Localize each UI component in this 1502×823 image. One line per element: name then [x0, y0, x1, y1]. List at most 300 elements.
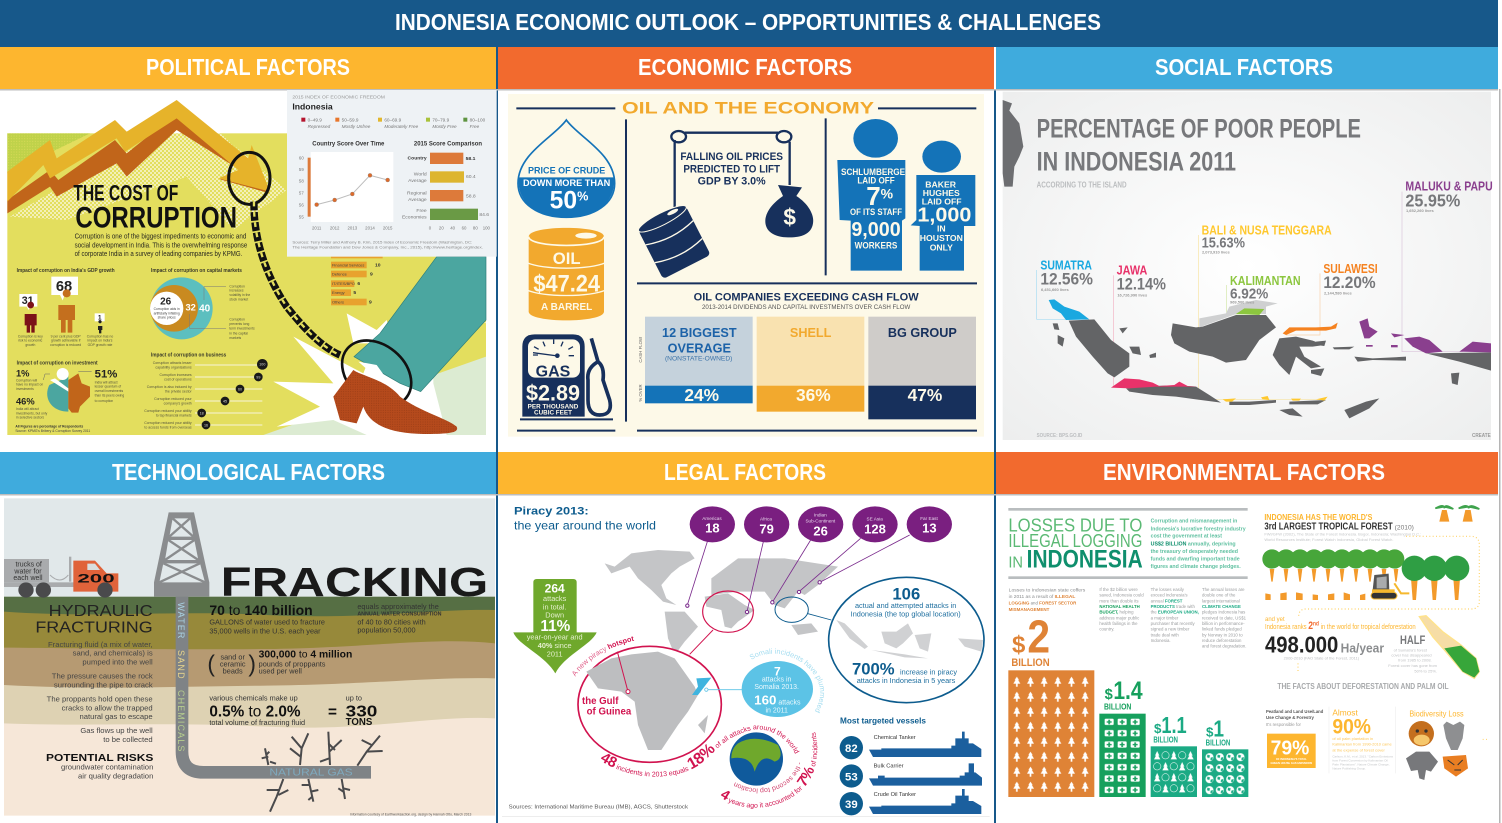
- losses heading: IN: [1008, 555, 1023, 572]
- proppants stat: pounds of proppants: [259, 659, 326, 668]
- money bag: $: [783, 204, 796, 230]
- heading: technological factors: [0, 452, 496, 494]
- money background: [263, 357, 486, 435]
- bar comparison chart: 60: [462, 226, 467, 231]
- spiral statistic text: - the second top location: [734, 762, 800, 794]
- business impact sliders: Corruption increases: [160, 373, 192, 377]
- source: SOURCE: BPS.GO.ID: [1037, 433, 1082, 439]
- falling oil prices text: PREDICTED TO LIFT: [683, 163, 780, 175]
- capital markets donut: 32: [185, 303, 196, 313]
- forest heading: [1264, 512, 1414, 533]
- forest source: World Resources Institute; Forest Watch Indonesia, Global Forest Watch.: [1264, 537, 1394, 542]
- most targeted vessels: Crude Oil Tanker: [874, 792, 916, 798]
- investment piggy: have no impact on: [16, 383, 43, 387]
- investment piggy: Source: KPMG's Bribery & Corruption Survey 2011: [15, 429, 90, 433]
- truck: trucks of: [15, 562, 42, 569]
- intro text: [75, 234, 247, 258]
- business impact sliders: company's growth: [164, 402, 192, 406]
- bar comparison chart: 0: [429, 226, 432, 231]
- column text: climate pledges: largest international: [1202, 598, 1240, 603]
- falling arrow: [7, 100, 270, 213]
- 90 percent block: [1332, 708, 1393, 771]
- column text: climate pledges: [1202, 587, 1247, 649]
- GDP impact block: 1: [98, 315, 102, 322]
- bar comparison chart: 80: [473, 226, 478, 231]
- biodiversity loss: [1406, 708, 1468, 780]
- business impact sliders: to access funds from overseas: [144, 426, 192, 430]
- proppants stat: ceramic: [220, 659, 246, 668]
- most targeted vessels: 39: [845, 799, 858, 811]
- losses heading: ILLEGAL LOGGING: [1008, 530, 1142, 551]
- column: 12 biggest: OVERAGE: [668, 341, 731, 355]
- 79 percent block: OF INDONESIA'S TOTAL: [1276, 757, 1307, 761]
- title bar: INDONESIA ECONOMIC OUTLOOK – OPPORTUNITIES & CHALLENGES: [395, 9, 1101, 35]
- jawa: 12.14%: [1117, 275, 1166, 294]
- baker hughes figure: LAID OFF: [922, 196, 962, 206]
- water comparison: population 50,000: [357, 626, 416, 635]
- cash flow heading: OIL COMPANIES EXCEEDING CASH FLOW: [694, 292, 919, 304]
- legend: 60–69.9: [384, 117, 402, 122]
- down arrow: 264 attacks: [513, 579, 597, 673]
- deforestation rank: Indonesia ranks 2: [1265, 620, 1317, 632]
- indonesia callout: 700%: [852, 659, 895, 678]
- business impact sliders: 16: [204, 423, 208, 427]
- sector bars: 9: [369, 299, 372, 305]
- chemicals stat: total volume of fracturing fluid: [209, 718, 305, 727]
- column text: climate pledges: received to date, US$1: [1202, 615, 1247, 620]
- investment piggy: 1%: [16, 369, 30, 379]
- heading: political factors: [0, 47, 496, 89]
- capital markets donut: Corruption: [229, 317, 245, 321]
- process text: sand, and chemicals) is: [73, 649, 153, 658]
- column: 12 biggest: 24%: [684, 385, 719, 405]
- derrick: [154, 512, 209, 597]
- sulawesi: 2,144,580 lives: [1324, 290, 1352, 295]
- half text: of Sumatra's forest: [1394, 647, 1428, 652]
- heading: environmental factors: ENVIRONMENTAL FACTORS: [1103, 459, 1385, 485]
- water stat: 70 to 140 billion: [209, 602, 313, 618]
- indonesia callout: attacks in Indonesia in 5 years: [857, 676, 956, 685]
- kalimantan: [1230, 273, 1301, 305]
- schlumberger figure: 9,000: [851, 218, 901, 241]
- oil barrel: A BARREL: [541, 302, 592, 313]
- line chart: 57: [299, 191, 304, 196]
- forest heading: 3rd LARGEST TROPICAL FOREST: [1264, 522, 1393, 533]
- pipe labels: CHEMICALS: [176, 690, 186, 751]
- sumatra: [1040, 257, 1093, 292]
- axis labels: CASH FLOW: [638, 336, 643, 363]
- line chart: 2012: [330, 226, 340, 231]
- process text: Fracturing fluid (a mix of water,: [48, 640, 153, 649]
- region bubbles: 128: [864, 521, 886, 536]
- column text: climate pledges: linked funds pledged: [1202, 627, 1242, 632]
- process text: Gas flows up the well: [80, 726, 153, 735]
- sources: The Heritage Foundation and Dow Jones & Company, Inc., 2015), http://www.heritage.org/index.: [292, 245, 483, 250]
- investment piggy: overall investments: [95, 389, 123, 393]
- forest source: FWI/GFW (2002), The State of the Forest Indonesia. Bogor, Indonesia; Washington D.C.:: [1264, 532, 1421, 537]
- legend: Mostly Free: [432, 124, 457, 129]
- water comparison: of 40 to 80 cities with: [357, 617, 426, 626]
- column text: state coffers: [1009, 588, 1086, 613]
- intro paragraph: funds and dwarfing important trade: [1151, 556, 1240, 562]
- jawa: JAWA: [1117, 263, 1148, 278]
- cash flow subheading: 2013-2014 DIVIDENDS AND CAPITAL INVESTMENTS OVER CASH FLOW: [702, 304, 910, 311]
- axis labels: [638, 336, 643, 402]
- down arrow: 264 attacks: Down: [545, 610, 564, 619]
- title: IN INDONESIA 2011: [1037, 147, 1236, 177]
- panel: environmental - deforestation: [1008, 506, 1488, 797]
- oil drop: PRICE OF CRUDE: [528, 166, 605, 176]
- GDP impact block: Corruption is key: [18, 334, 43, 338]
- heading: economic factors: ECONOMIC FACTORS: [638, 54, 852, 80]
- world map: [605, 550, 838, 655]
- line chart: 2013: [348, 226, 358, 231]
- investment piggy: India will attract: [16, 407, 39, 411]
- intro text: social development in India. This is the overwhelming response: [75, 242, 247, 249]
- sulawesi: 12.20%: [1323, 273, 1376, 292]
- losses heading: [1008, 515, 1143, 574]
- truck: water for: [13, 568, 42, 575]
- GDP impact block: impact on India's: [88, 339, 113, 343]
- most targeted vessels: Most targeted vessels: [840, 716, 927, 725]
- bar comparison chart: Regional: [407, 190, 427, 196]
- stat column: $1.1 billion: [1151, 712, 1197, 797]
- chemicals stat: 0.5% to 2.0%: [209, 703, 301, 720]
- half text: [1388, 633, 1438, 673]
- economic freedom chart panel: 2015 INDEX OF ECONOMIC FREEDOM: [292, 94, 385, 100]
- heading: economic factors: [498, 47, 994, 89]
- palm oil heading: THE FACTS ABOUT DEFORESTATION AND PALM OIL: [1277, 681, 1449, 691]
- chemicals stat: [209, 694, 377, 728]
- stat column: $1.1 billion: 1.1: [1161, 712, 1187, 738]
- down arrow: 264 attacks: year-on-year and: [527, 633, 583, 642]
- column: bg group: 47%: [908, 385, 942, 405]
- sulawesi: SULAWESI: [1323, 261, 1378, 276]
- capital markets donut: Corruption aids in: [154, 307, 180, 311]
- process text: [47, 640, 153, 744]
- credit: Information courtesy of Earthworksaction.org, design by Hannah Otto, March 2013: [350, 812, 472, 816]
- business impact sliders: capability organisations: [155, 366, 192, 370]
- indonesia callout: [775, 577, 984, 703]
- economic freedom chart panel: [287, 90, 497, 257]
- spiral statistic text: 48 incidents in 2013 equals 18% of all attacks around the world: [600, 726, 800, 777]
- bali and nusa tenggara: BALI & NUSA TENGGARA: [1202, 222, 1332, 237]
- bali and nusa tenggara: 15.63%: [1202, 236, 1245, 252]
- baker hughes figure: [911, 141, 975, 271]
- oil and the economy heading: OIL AND THE ECONOMY: [622, 98, 874, 117]
- water stat: GALLONS of water used to fracture: [209, 617, 325, 626]
- column text: forest products: The losses easily: [1151, 587, 1185, 592]
- truck: each well: [13, 575, 43, 582]
- capital markets donut: markets: [229, 336, 242, 340]
- truck: 200: [77, 571, 115, 585]
- down arrow: 264 attacks: 11%: [540, 618, 571, 635]
- potential risks: POTENTIAL RISKS: [46, 753, 154, 764]
- kalimantan: 6.92%: [1230, 287, 1268, 303]
- sector bars: 9: [370, 271, 373, 277]
- gulf of guinea callout: the Gulf: [582, 696, 619, 707]
- investment piggy: investments, but only: [16, 411, 48, 415]
- somalia callout: in 2011: [765, 707, 788, 714]
- silhouette: [1003, 100, 1023, 187]
- 498,000 stat: [1265, 631, 1384, 661]
- GDP impact block: growth: [25, 343, 35, 347]
- 498,000 stat: Ha/year: [1341, 640, 1384, 655]
- title: corruption: CORRUPTION: [75, 201, 237, 234]
- stat column: $1 billion: $: [1206, 724, 1214, 739]
- panel: social - poor people map: [1003, 92, 1493, 440]
- 498,000 stat: 498.000: [1265, 631, 1338, 657]
- gulf of guinea callout: A new piracy hotspot: [572, 636, 634, 676]
- column text: health budget: [1099, 587, 1144, 632]
- intro paragraph: cost the government at least: [1151, 534, 1222, 540]
- most targeted vessels: Chemical Tanker: [874, 735, 916, 741]
- forest heading: INDONESIA HAS THE WORLD'S: [1264, 512, 1373, 522]
- bar comparison chart: [402, 142, 491, 231]
- region bubbles: 79: [759, 521, 774, 536]
- column: shell: 36%: [796, 385, 831, 405]
- indonesia callout: increase in piracy: [900, 668, 957, 677]
- investment piggy: than its peers owing: [95, 393, 124, 397]
- GDP impact block: 9 per cent plus GDP: [51, 334, 81, 338]
- half text: 50% to 25%.: [1414, 668, 1437, 673]
- oil barrel: $47.24: [533, 271, 601, 298]
- column: bg group: BG GROUP: [888, 326, 957, 340]
- tree row: [1262, 549, 1469, 600]
- shoe: [333, 370, 457, 434]
- column text: forest products: PRODUCTS trade with: [1151, 604, 1196, 609]
- capital markets donut: Corruption: [229, 284, 245, 288]
- forest source: [1264, 532, 1421, 542]
- down arrow: 264 attacks: in total.: [543, 602, 566, 611]
- sector bars: Others: [332, 299, 344, 304]
- legend: 70–79.9: [432, 117, 450, 122]
- heading: legal factors: LEGAL FACTORS: [664, 459, 826, 485]
- business impact sliders: 60: [238, 387, 242, 391]
- schlumberger figure: 7: [866, 181, 881, 211]
- created by: CREATE: [1472, 433, 1491, 439]
- investment piggy: 46%: [16, 396, 35, 406]
- half text: Forest cover has gone from: [1388, 663, 1438, 668]
- white burst: [273, 313, 447, 435]
- line chart: [299, 142, 393, 231]
- maluku and papua: 1,652,260 lives: [1406, 208, 1434, 213]
- well pipe: [182, 597, 371, 772]
- capital markets donut: prevents long: [229, 322, 249, 326]
- bar comparison chart: 2015 Score Comparison: [414, 142, 482, 148]
- deforestation rank: [1265, 617, 1416, 632]
- GDP impact block: Impact of corruption on India's GDP growth: [17, 268, 115, 274]
- deforestation rank: and yet: [1265, 617, 1285, 623]
- gas pump: CUBIC FEET: [534, 410, 572, 417]
- trailing dots: [1483, 738, 1488, 741]
- falling oil prices text: FALLING OIL PRICES: [680, 151, 783, 163]
- down arrow: 264 attacks: 264: [545, 581, 565, 595]
- GDP impact block: growth achievable if: [51, 339, 80, 343]
- ground layers: [4, 597, 495, 816]
- line chart: 56: [299, 202, 304, 207]
- intro paragraph: the treasury of desperately needed: [1151, 549, 1238, 555]
- column text: health budget: more than double its: [1099, 598, 1139, 603]
- process text: pumped into the well: [82, 657, 153, 666]
- heading: technological factors: TECHNOLOGICAL FACTORS: [112, 459, 385, 485]
- heading: social factors: SOCIAL FACTORS: [1155, 54, 1333, 80]
- column text: forest products: the EUROPEAN UNION,: [1151, 610, 1199, 615]
- schlumberger figure: LAID OFF: [857, 176, 895, 186]
- down arrow: 264 attacks: attacks: [543, 594, 567, 603]
- 79 percent block: Peatland and Land Use/Land: [1266, 709, 1324, 714]
- palm icons: [1435, 506, 1479, 522]
- baker hughes figure: 1,000: [917, 205, 971, 227]
- 90 percent block: Nature Publishing Group.: [1332, 767, 1366, 771]
- baker hughes figure: BAKER: [925, 179, 957, 189]
- investment piggy: investments: [16, 387, 34, 391]
- proppants stat: (: [207, 651, 215, 677]
- bali and nusa tenggara: [1202, 222, 1332, 254]
- sulawesi: [1323, 261, 1378, 295]
- hydraulic fracturing heading: FRACTURING: [35, 620, 153, 637]
- investment piggy: [15, 360, 124, 433]
- stat column: $1 billion: [1202, 715, 1248, 797]
- baker hughes figure: HUGHES: [923, 188, 960, 198]
- column text: state coffers: Losses to Indonesian state coffers: [1009, 588, 1086, 594]
- natural gas label: NATURAL GAS: [269, 768, 353, 779]
- bar comparison chart: 40: [450, 226, 456, 231]
- investment piggy: India will attract: [95, 380, 118, 384]
- stat column: $1.4 billion: [1099, 677, 1146, 797]
- trouser leg: [354, 257, 486, 392]
- title: Piracy 2013:: [514, 506, 589, 518]
- business impact sliders: 100: [259, 363, 265, 367]
- water comparison: ANNUAL WATER CONSUMPTION: [357, 612, 442, 618]
- intro paragraph: US$2 BILLION annually, depriving: [1151, 541, 1236, 547]
- somalia callout: 160 attacks: [754, 692, 801, 707]
- biodiversity loss: Biodiversity Loss: [1409, 708, 1464, 718]
- chemicals stat: TONS: [346, 717, 373, 728]
- column text: state coffers: MISMANAGEMENT: [1009, 607, 1049, 613]
- 90 percent block: at the expense of forest cover: [1332, 748, 1385, 753]
- bar comparison chart: Average: [408, 197, 427, 203]
- chain: [254, 202, 340, 355]
- gas pump: PER THOUSAND: [528, 403, 579, 410]
- legend: Moderately Free: [384, 124, 419, 129]
- column text: forest products: purchaser that recently: [1151, 621, 1196, 626]
- hydraulic fracturing heading: HYDRAULIC: [49, 603, 153, 620]
- investment piggy: 51%: [95, 368, 117, 380]
- legend: 0–49.9: [308, 117, 322, 122]
- bulldozer: [1371, 574, 1409, 599]
- potential risks: groundwater contamination: [61, 763, 153, 772]
- column text: health budget: NATIONAL HEALTH: [1099, 604, 1140, 609]
- falling oil prices text: GDP BY 3.0%: [698, 175, 766, 187]
- column: 12 biggest: (NONSTATE-OWNED): [665, 356, 732, 363]
- losses heading: LOSSES DUE TO: [1008, 515, 1142, 536]
- GDP impact block: Corruption has no: [87, 334, 113, 338]
- somalia callout: attacks in: [762, 677, 792, 684]
- intro paragraph: Corruption and mismanagement in: [1151, 519, 1238, 525]
- bar comparison chart: 60.4: [466, 174, 476, 180]
- proppants stat: 300,000 to 4 million: [259, 650, 352, 661]
- bali and nusa tenggara: 2,073,910 lives: [1202, 249, 1230, 254]
- capital markets donut: 40: [199, 303, 211, 314]
- bar comparison chart: 20: [439, 226, 444, 231]
- column text: climate pledges: by Norway in 2010 to: [1202, 632, 1243, 637]
- gulf of guinea callout: [572, 590, 754, 764]
- panel: economic - oil and the economy: [508, 94, 984, 437]
- line chart: 59: [299, 167, 304, 172]
- intro paragraph: Indonesia's lucrative forestry industry: [1151, 526, 1246, 532]
- ankle ring: [329, 327, 424, 420]
- falling oil prices text: [680, 151, 783, 187]
- investment piggy: in selective sectors: [16, 416, 44, 420]
- stat column: $1.4 billion: BILLION: [1104, 701, 1131, 711]
- investment piggy: Impact of corruption on investment: [17, 360, 98, 366]
- business impact sliders: to tap financial markets: [156, 414, 192, 418]
- business impact sliders: Corruption reduced your: [154, 397, 193, 401]
- investment piggy: lesser quantum of: [95, 385, 121, 389]
- investment piggy: All Figures are percentage of Respondents: [15, 424, 83, 428]
- intro text: Corruption is one of the biggest impediments to economic and: [75, 234, 246, 241]
- business impact sliders: Corruption is also induced by: [147, 385, 192, 389]
- water stat: [209, 602, 325, 635]
- fracking title: FRACKING: [221, 559, 488, 605]
- column: 12 biggest: 12 BIGGEST: [662, 326, 737, 340]
- 90 percent block: 90%: [1332, 715, 1371, 739]
- heading: environmental factors: [996, 452, 1498, 494]
- GDP impact block: [17, 268, 115, 347]
- fracture cracks: [262, 732, 383, 812]
- schlumberger figure: SCHLUMBERGER: [841, 167, 911, 177]
- title: [1037, 113, 1361, 177]
- GDP impact block: GDP growth rate: [88, 343, 113, 347]
- spiral statistic text: [600, 726, 818, 809]
- kalimantan: KALIMANTAN: [1230, 273, 1301, 288]
- most targeted vessels: 82: [845, 743, 858, 755]
- indonesia callout: 106: [892, 584, 920, 603]
- chemicals stat: up to: [346, 694, 362, 703]
- kalimantan: 969,500 lives: [1230, 300, 1255, 305]
- stat column: $1.1 billion: BILLION: [1153, 735, 1178, 744]
- intro paragraph: figures and climate change pledges.: [1151, 564, 1241, 570]
- pipe labels: WATER: [176, 602, 186, 639]
- chain ring: [229, 152, 270, 204]
- sock: [358, 362, 390, 383]
- column: bg group: [868, 317, 976, 419]
- region bubbles: Americas: [702, 516, 722, 521]
- heading: social factors: [996, 47, 1498, 89]
- bar comparison chart: 84.6: [479, 212, 489, 218]
- potential risks: air quality degradation: [78, 772, 153, 781]
- intro paragraph: [1151, 519, 1246, 570]
- 90 percent block: Kalimantan from 1990-2010 came: [1332, 742, 1392, 747]
- deforestation rank: nd: [1313, 622, 1319, 628]
- water comparison: equals approximately the: [357, 602, 439, 611]
- capital markets donut: term investments: [229, 327, 255, 331]
- column: shell: SHELL: [790, 326, 832, 340]
- legend: Free: [470, 124, 480, 129]
- bar comparison chart: 58.8: [466, 193, 476, 199]
- intro text: of corporate India in a survey of leading companies by KPMG.: [75, 251, 242, 258]
- stat column: $1.1 billion: $: [1154, 721, 1162, 736]
- sector bars: Defence: [332, 271, 348, 276]
- hydraulic fracturing heading: [35, 603, 153, 637]
- most targeted vessels: Bulk Carrier: [874, 763, 904, 769]
- truck: [4, 557, 118, 598]
- pulley hanger: [671, 131, 791, 212]
- economic freedom chart panel: Indonesia: [292, 101, 333, 111]
- title: [514, 506, 656, 533]
- business impact sliders: the private sector: [165, 390, 192, 394]
